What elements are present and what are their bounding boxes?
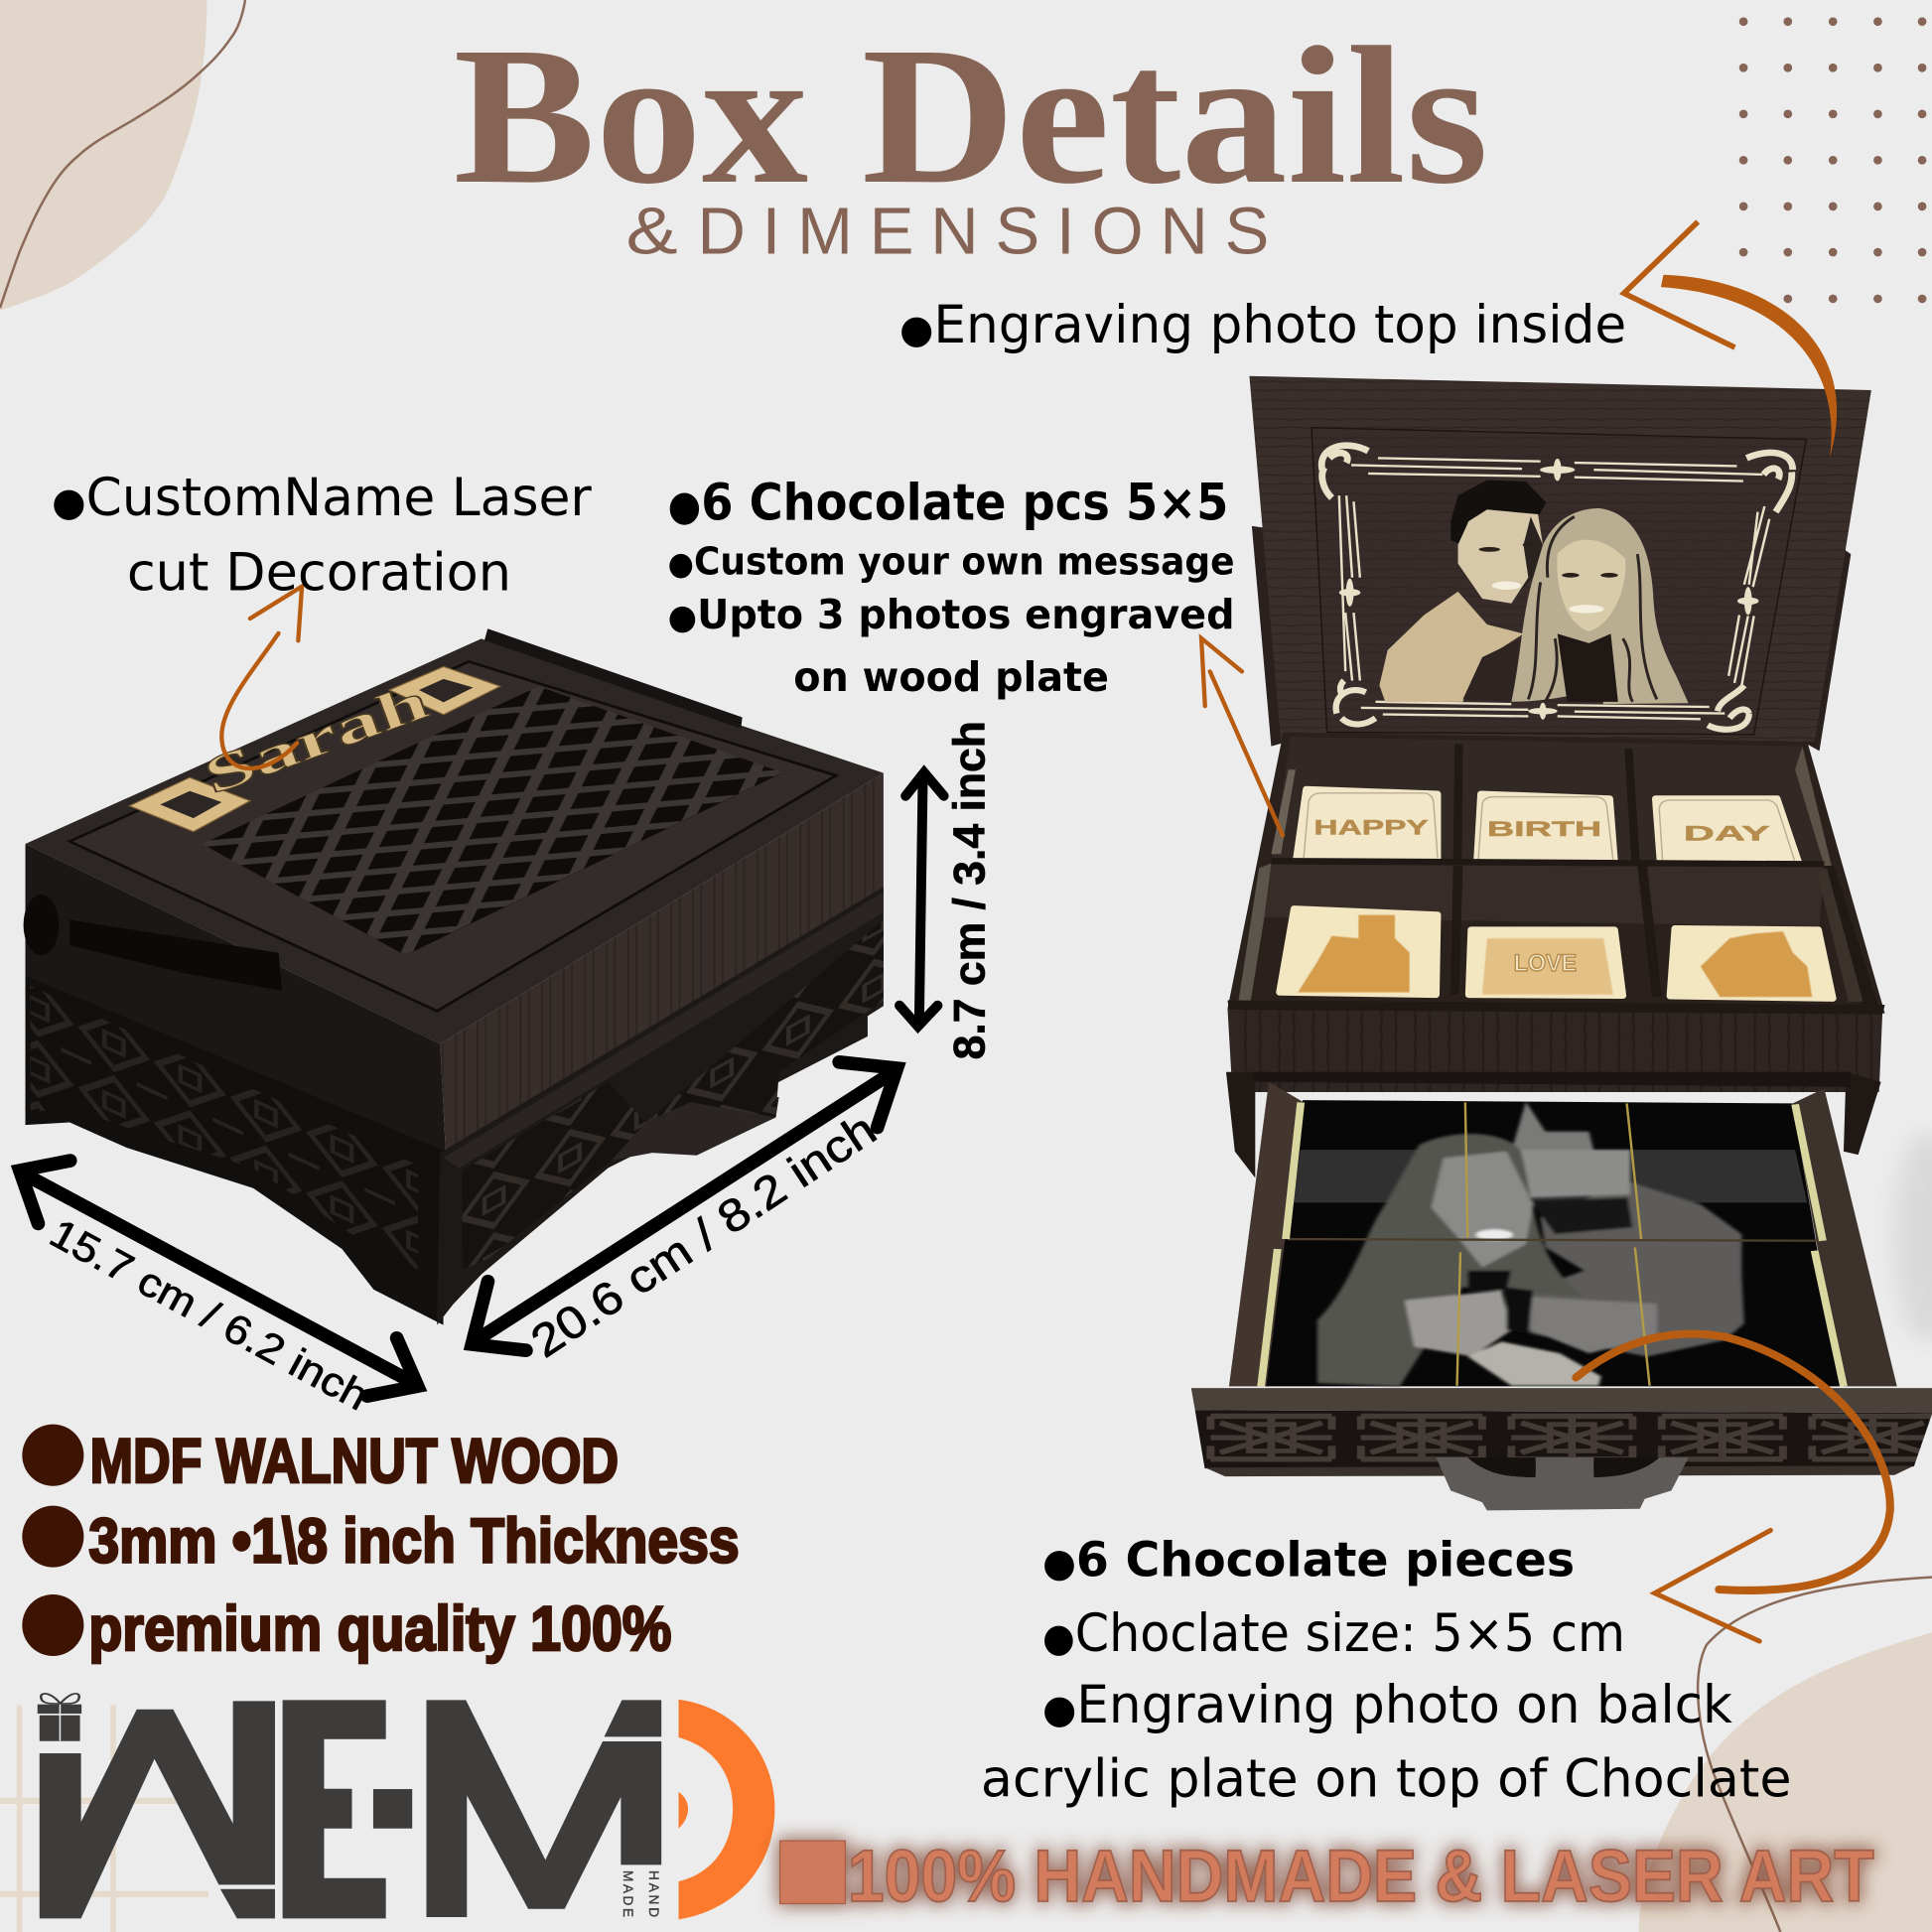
- text: drawer details: ●Engraving photo on balck: [1042, 1676, 1733, 1735]
- tray inner sides: [1795, 747, 1832, 866]
- chocolate borders: [1304, 793, 1795, 863]
- arrow: engraving photo top inside: [1624, 221, 1837, 457]
- front row back walls: [1264, 864, 1824, 926]
- woman's hair: [1317, 1134, 1585, 1386]
- chocolate labels: HAPPY: [1313, 815, 1430, 839]
- curved shaft: [1661, 275, 1837, 457]
- label: height: 8.7 cm / 3.4 inch: [946, 721, 995, 1059]
- logo tagline: [621, 1870, 661, 1917]
- woman's top: [1558, 633, 1618, 702]
- lid plate: [69, 661, 836, 1011]
- outer case right: [1844, 1072, 1881, 1155]
- man's body: [1379, 592, 1524, 702]
- man's arm shadow: [1462, 638, 1521, 702]
- drawer front lattice: [1195, 1410, 1932, 1468]
- text: chocolate message details: [668, 474, 1235, 701]
- label: length: 20.6 cm / 8.2 inch: [521, 1103, 885, 1367]
- gold square right: [389, 666, 500, 715]
- arms: [1405, 1291, 1511, 1356]
- gold dividers: [1289, 1102, 1822, 1386]
- banner: [780, 1835, 1874, 1917]
- chocolate labels: LOVE: [1514, 951, 1577, 977]
- back rail: [484, 628, 743, 729]
- text: custom name decoration: cut Decoration: [127, 543, 511, 603]
- arrow: drawer: [1576, 1334, 1890, 1641]
- arrow: height dimension: [899, 772, 944, 1027]
- text: drawer details: [981, 1532, 1792, 1809]
- lattice panel: [203, 687, 782, 955]
- item: premium quality: premium quality 100%: [88, 1594, 671, 1664]
- text: chocolate message details: ●6 Chocolate pcs 5×5: [668, 474, 1228, 532]
- side brace right: [1802, 542, 1851, 751]
- logo tagline: HAND: [646, 1870, 661, 1917]
- logo tagline: MADE: [621, 1870, 635, 1917]
- box top surface: [26, 638, 884, 1043]
- item: MDF walnut wood: MDF WALNUT WOOD: [90, 1427, 619, 1496]
- lid: [1249, 376, 1871, 742]
- front row chocolates: [1280, 908, 1833, 999]
- man's shirt: [1511, 1181, 1744, 1356]
- hinge: [24, 895, 282, 991]
- banner square: [780, 1841, 845, 1903]
- photo: open drawer with engraved acrylic: [1191, 1072, 1932, 1510]
- chocolate labels: DAY: [1684, 821, 1771, 845]
- brass rails: [1261, 1102, 1844, 1386]
- text: chocolate message details: ●Upto 3 photos engraved: [668, 591, 1235, 638]
- name text: Sarah: [197, 673, 436, 806]
- drawer right wall: [1793, 1088, 1897, 1386]
- lid inner panel: [1311, 428, 1806, 735]
- text: drawer details: acrylic plate on top of Choclate: [981, 1749, 1792, 1809]
- lattice panel pattern: [203, 686, 782, 955]
- arrow head: [1624, 221, 1734, 347]
- tray underside: [1254, 1072, 1851, 1087]
- subtitle: DIMENSIONS: [697, 195, 1269, 269]
- base lattice right: [437, 887, 884, 1325]
- decorative blob: bottom right: [1639, 1578, 1932, 1932]
- arrow: photos engraved: [1201, 638, 1283, 835]
- faces detail: [1479, 543, 1618, 578]
- logo orange D: [679, 1700, 774, 1919]
- logo letters: [40, 1700, 661, 1918]
- box left face: [26, 844, 447, 1168]
- gold name decoration: [129, 666, 500, 832]
- acrylic plate: [1267, 1100, 1841, 1386]
- woman's face: [1432, 1152, 1533, 1267]
- ornamental frame: [1321, 446, 1793, 730]
- dividers back row: [1453, 744, 1640, 864]
- text: drawer details: ●Choclate size: 5×5 cm: [1042, 1604, 1625, 1664]
- soft shadow: [1894, 1132, 1932, 1343]
- drawer left wall: [1229, 1082, 1303, 1386]
- arrow: custom name: [221, 587, 302, 768]
- frame flowers: [1339, 459, 1758, 720]
- title: Box Details: [454, 6, 1488, 224]
- text: custom name decoration: ●CustomName Laser: [52, 469, 592, 528]
- text: custom name decoration: [52, 469, 592, 603]
- chocolate labels: BIRTH: [1487, 816, 1601, 841]
- label: width: 15.7 cm / 6.2 inch: [43, 1209, 376, 1419]
- neck shadow: [1467, 1271, 1511, 1291]
- side brace left: [1252, 526, 1289, 747]
- lattice base left pattern: [31, 986, 418, 1269]
- drawer front top: [1191, 1388, 1932, 1413]
- tray front lip: [1227, 1000, 1885, 1015]
- chocolate labels: [1313, 815, 1771, 977]
- item: thickness: 3mm •1\8 inch Thickness: [88, 1507, 740, 1577]
- base top edge: [444, 892, 884, 1168]
- outer case sides: [1226, 1072, 1255, 1177]
- text: drawer details: ●6 Chocolate pieces: [1042, 1532, 1575, 1587]
- man's top of head: [1511, 1102, 1593, 1152]
- divider front edge: [1271, 858, 1824, 867]
- man's face shade: [1511, 516, 1543, 604]
- man's hair: [1450, 481, 1546, 545]
- chocolate engravings: [1298, 915, 1812, 997]
- text: chocolate message details: ●Custom your own message: [668, 539, 1235, 584]
- lattice base right pattern upper: [646, 920, 884, 1123]
- arrow: width dimension: [20, 1161, 418, 1396]
- tray interior back wall: [1271, 737, 1822, 864]
- man's face: [1458, 509, 1543, 604]
- icon: gift box: [38, 1694, 81, 1741]
- photo: open box with engraved lid and chocolates: [1227, 376, 1885, 1092]
- logo: [0, 1694, 774, 1932]
- engraved figures: [1317, 1102, 1744, 1386]
- tray front face: [1227, 1009, 1882, 1092]
- woman's face: [1557, 540, 1625, 631]
- dividers front row: [1450, 866, 1662, 997]
- hair strands: [1528, 516, 1657, 702]
- text: chocolate message details: on wood plate: [793, 653, 1109, 701]
- drawer bottom: [1204, 1465, 1914, 1476]
- logo background lines: [0, 1705, 208, 1932]
- tray side walls: [1237, 864, 1880, 1011]
- decorative blob: top left: [0, 0, 245, 311]
- material list: [22, 1425, 740, 1664]
- gold square left: [129, 777, 250, 832]
- base lattice left: [26, 976, 444, 1325]
- drawer handle: [612, 1097, 779, 1161]
- reflection band: [1293, 1150, 1807, 1202]
- tray body: [1227, 732, 1885, 1014]
- woman's hair: [1511, 508, 1689, 704]
- top row chocolates: [1297, 789, 1799, 864]
- photo: closed box with laser-cut lid: [24, 628, 884, 1325]
- handle: [1437, 1457, 1689, 1510]
- dot grid: [1739, 17, 1926, 303]
- tray inner side left: [1271, 769, 1296, 854]
- box right face: [440, 773, 884, 1168]
- text: engraving photo top inside: ●Engraving photo top inside: [899, 296, 1626, 355]
- subtitle: &: [625, 195, 678, 269]
- lattice base right pattern: [463, 1082, 646, 1269]
- engraved couple portrait: [1379, 481, 1689, 704]
- arrow: length dimension: [472, 1062, 897, 1350]
